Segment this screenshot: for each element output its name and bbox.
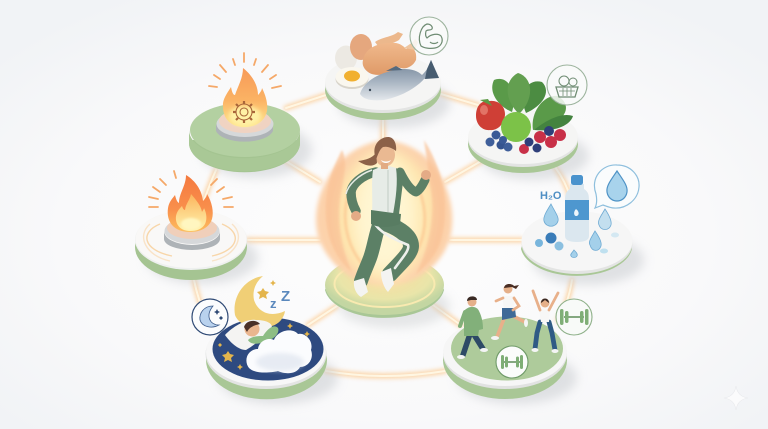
icon: berries — [486, 126, 566, 154]
icon: spinach — [492, 73, 573, 130]
icon: muscle badge — [410, 17, 448, 55]
panel: exercise — [443, 284, 592, 404]
rays — [209, 53, 281, 88]
figure: walking man — [457, 296, 488, 359]
icon: moon badge — [192, 299, 228, 335]
shoes — [354, 278, 368, 297]
icon: dumbbell badge — [556, 299, 592, 335]
back leg — [361, 222, 380, 281]
icon: eggs — [335, 34, 372, 70]
icon: water beads — [535, 232, 619, 254]
icon: green apple — [501, 112, 531, 142]
panel: calorie burn flame — [135, 171, 258, 284]
H2O label: H₂O — [540, 190, 562, 202]
snore letters — [270, 288, 290, 311]
jacket — [372, 165, 403, 214]
icon: fish — [360, 60, 439, 100]
panel: fruits and greens — [468, 65, 589, 180]
icon: pillow and sleeper — [225, 320, 278, 350]
flame aura — [316, 140, 452, 284]
centre platform — [325, 255, 450, 328]
icon: water drops — [544, 204, 611, 258]
icon: flame — [168, 175, 213, 232]
icon: cloud blanket — [246, 330, 312, 373]
icon: chicken — [363, 32, 418, 75]
panel: metabolism gear flame — [189, 53, 312, 178]
head — [375, 144, 395, 166]
icon: dumbbell on platform — [496, 346, 528, 378]
watermark sparkle — [724, 386, 748, 410]
icon: drop speech bubble — [594, 165, 639, 208]
icon: stars — [218, 280, 310, 370]
snore letters: Z — [281, 288, 290, 305]
icon: fried egg — [336, 67, 368, 89]
panel: hydration — [521, 165, 644, 285]
figure: runner — [346, 137, 431, 297]
front leg — [382, 222, 411, 274]
panel: sleep — [192, 276, 338, 404]
icon: flame with gear — [223, 68, 267, 127]
pedestal — [216, 109, 274, 142]
pedestal — [164, 217, 220, 250]
icon: water bottle — [565, 175, 589, 242]
icon: basket badge — [547, 65, 587, 105]
icon: red apple — [476, 99, 505, 130]
rays — [149, 171, 233, 207]
panel: protein foods — [325, 17, 450, 128]
rings — [144, 224, 238, 261]
figure: cheering woman — [532, 291, 558, 353]
right arm — [400, 172, 425, 192]
snore letters: z — [270, 296, 277, 311]
panel: central runner — [316, 137, 452, 328]
figure: jogging woman — [491, 284, 528, 340]
icon: crescent moon — [235, 276, 285, 327]
left arm — [351, 172, 376, 211]
glowing connection network — [194, 94, 572, 376]
